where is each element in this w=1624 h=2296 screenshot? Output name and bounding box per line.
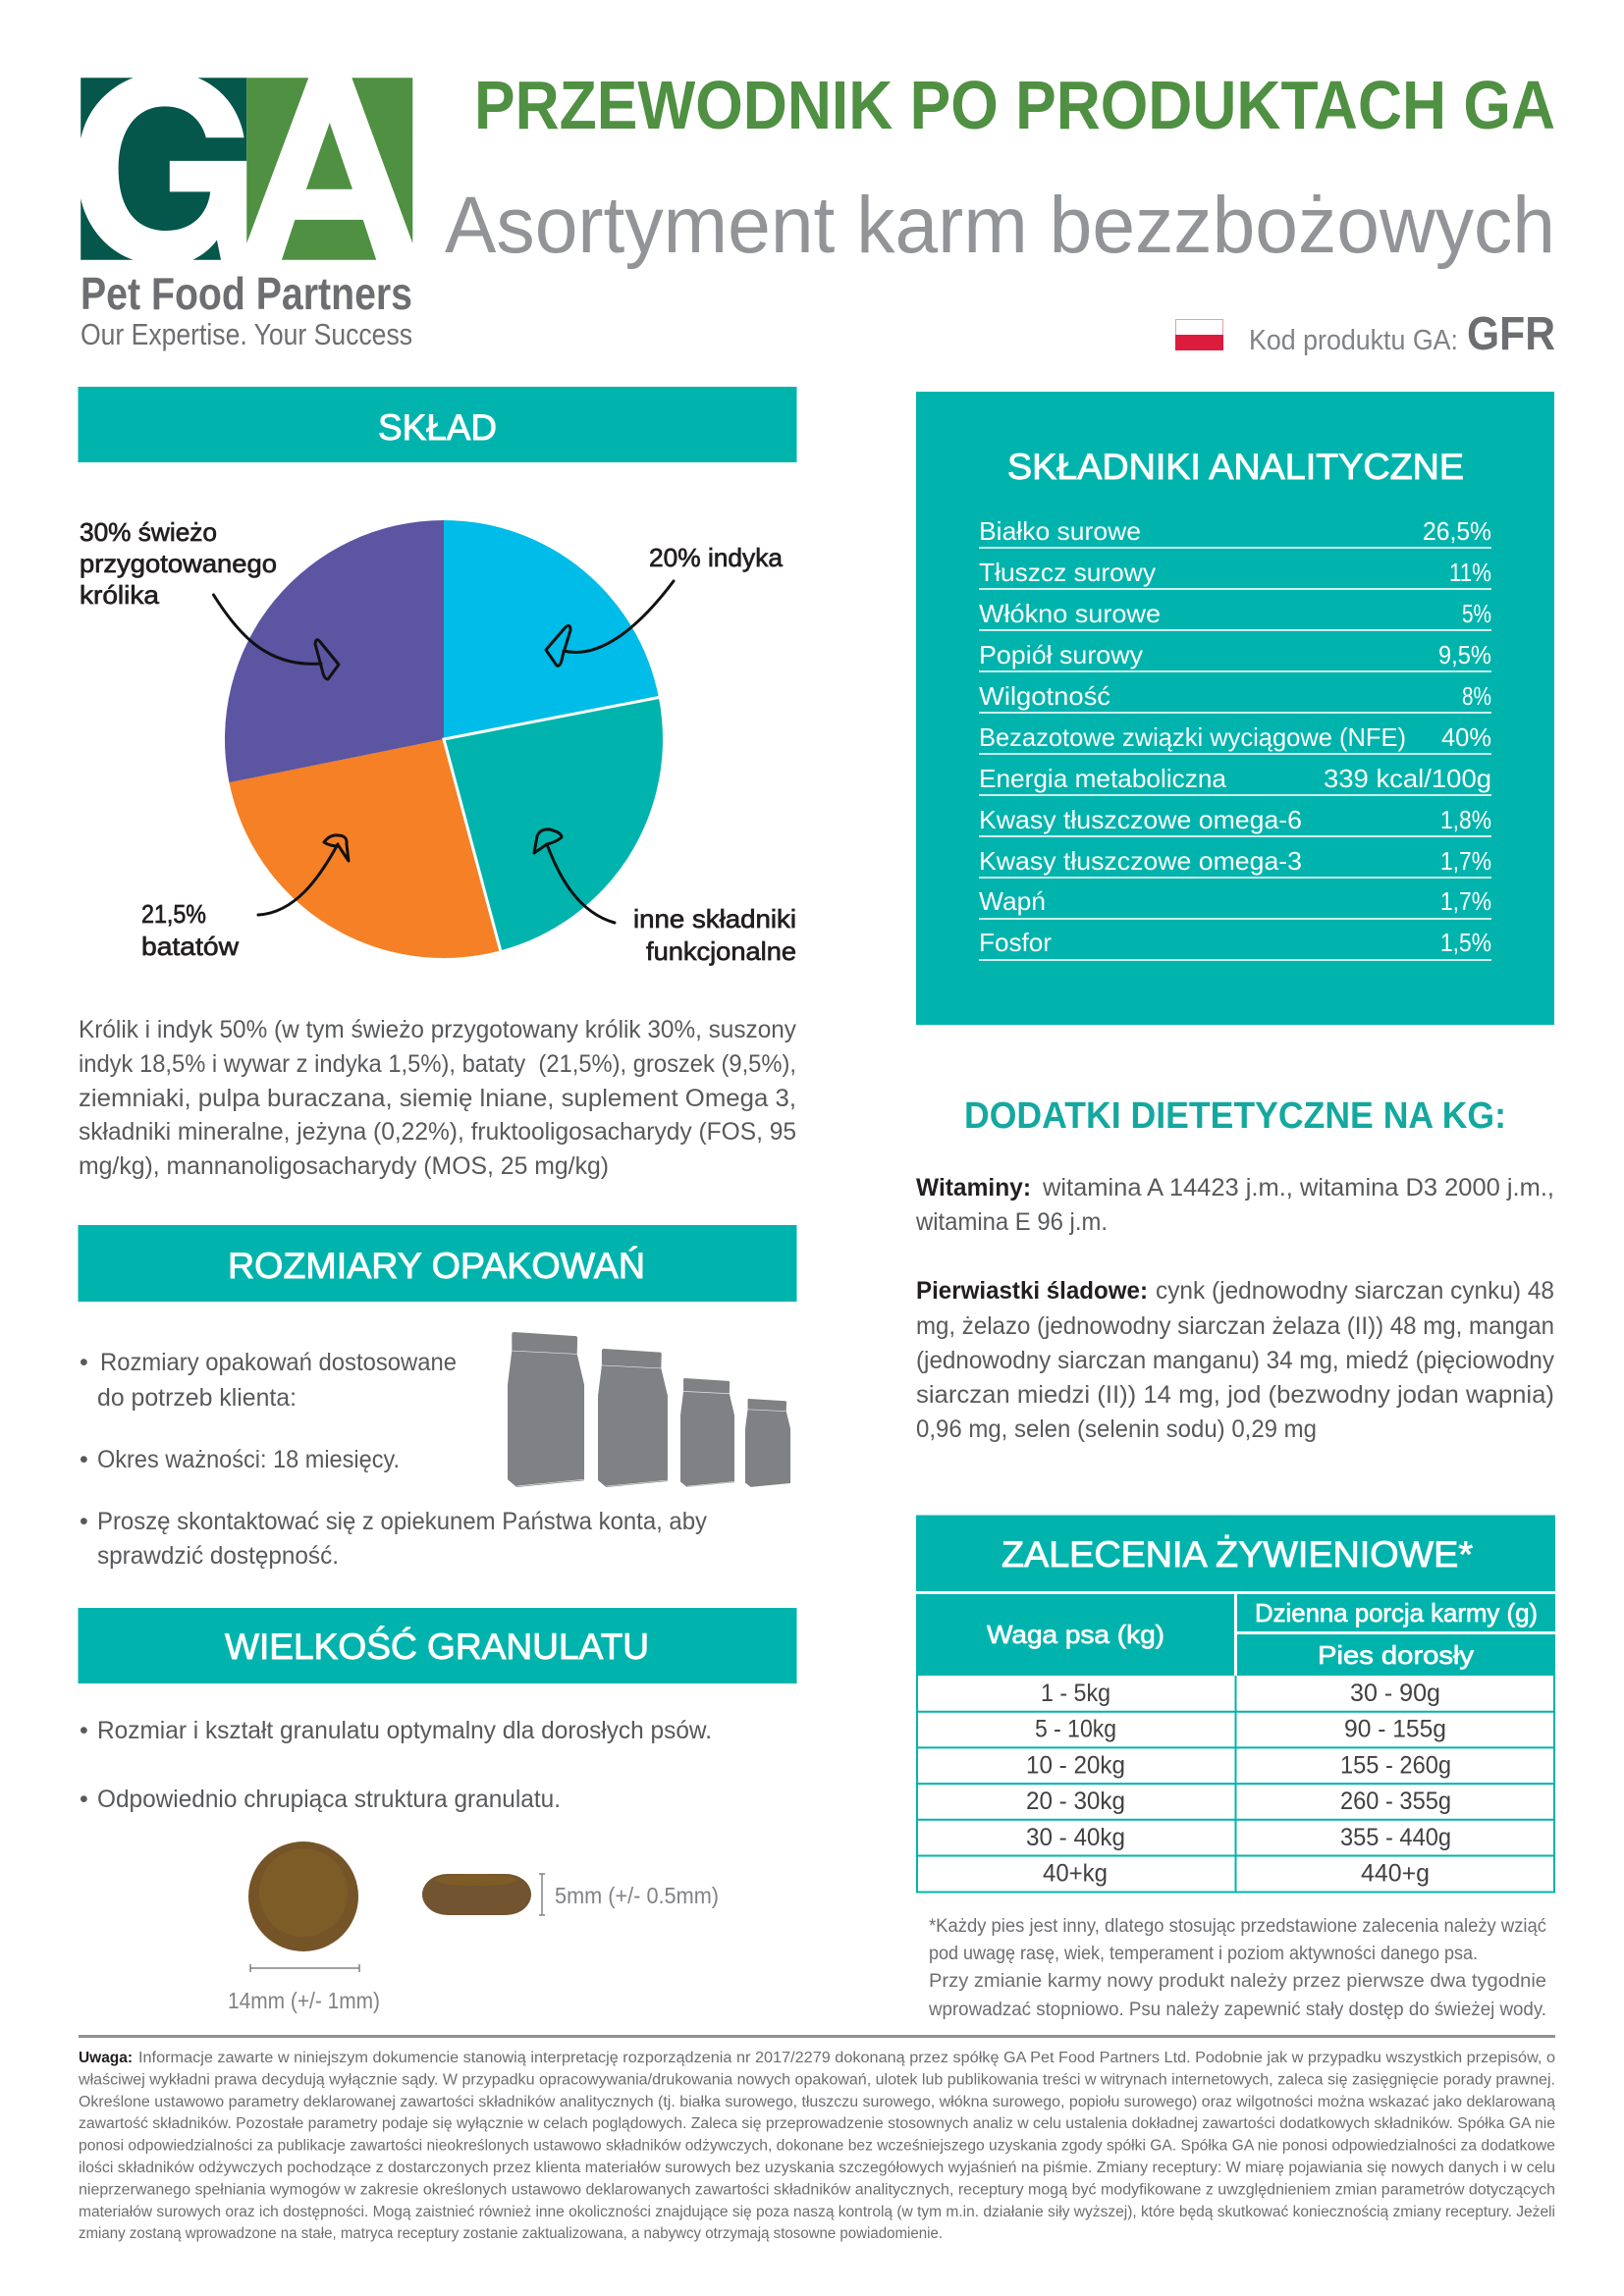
product code [1249, 308, 1555, 360]
row: fibre: 5% [1462, 599, 1491, 628]
pie label: rabbit: 30% świeżo [80, 517, 217, 547]
text block: ingredients [79, 1016, 796, 1180]
disclaimer [78, 2050, 1555, 2242]
dimension: kibble thickness: 5mm (+/- 0.5mm) [555, 1883, 719, 1908]
panel: pack sizes heading [79, 1225, 797, 1302]
dimension: kibble diameter [228, 1964, 380, 2013]
row: omega-3: Kwasy tłuszczowe omega-3 [979, 846, 1302, 876]
logo mark: G and A letters [81, 78, 412, 260]
pie label: other ingredients [633, 904, 796, 966]
row: omega-3 [979, 846, 1491, 879]
row: ash: Popiół surowy [979, 640, 1143, 669]
row: fat: Tłuszcz surowy [979, 558, 1156, 587]
text block: trace elements: cynk (jednowodny siarczan cynku) 48 [1156, 1277, 1554, 1305]
row: moisture: Wilgotność [979, 681, 1110, 711]
text block: trace elements: (jednowodny siarczan manganu) 34 mg, miedź (pięciowodny [916, 1347, 1554, 1374]
row: fibre [979, 599, 1491, 631]
row: omega-6: 1,8% [1440, 805, 1491, 834]
row: protein: Białko surowe [979, 516, 1141, 546]
text block: pack sizes bullets: Okres ważności: 18 miesięcy. [97, 1446, 400, 1473]
row: moisture [979, 681, 1491, 714]
row: fat [979, 558, 1491, 590]
table row: 5-10 kg: 5 - 10kg [1035, 1716, 1116, 1743]
panel: analytical constituents [916, 392, 1554, 1025]
text block: trace elements: mg, żelazo (jednowodny siarczan żelaza (II)) 48 mg, mangan [916, 1312, 1554, 1340]
pie label: sweet potato: 21,5% [141, 899, 206, 929]
text block: kibble bullets: Odpowiednio chrupiąca struktura granulatu. [97, 1786, 561, 1813]
pie chart: composition [225, 520, 663, 958]
table row: 30-40 kg: 355 - 440g [1340, 1824, 1451, 1851]
row: phosphorus: Fosfor [979, 928, 1052, 957]
logo wordmark: Pet Food Partners [81, 268, 412, 319]
row: phosphorus: 1,5% [1440, 928, 1491, 957]
row: NFE: 40% [1441, 722, 1491, 752]
dimension: kibble thickness [539, 1874, 719, 1915]
table row: 40+ kg: 40+kg [1043, 1859, 1108, 1887]
panel: skład heading: SKŁAD [378, 407, 497, 448]
icon: kibble top view [248, 1842, 358, 1951]
table row: 30-40 kg [1026, 1824, 1451, 1851]
row: fibre: Włókno surowe [979, 599, 1161, 628]
text block: kibble bullets: Rozmiar i kształt granulatu optymalny dla dorosłych psów. [97, 1717, 712, 1744]
table row: 20-30 kg: 260 - 355g [1340, 1788, 1451, 1815]
table row: 20-30 kg: 20 - 30kg [1026, 1788, 1125, 1815]
row: omega-6: Kwasy tłuszczowe omega-6 [979, 805, 1302, 834]
text block: trace elements: siarczan miedzi (II)) 14 mg, jod (bezwodny jodan wapnia) [916, 1381, 1554, 1409]
pie slice: turkey 20% [444, 520, 659, 739]
table header: adult dog: Pies dorosły [1318, 1640, 1474, 1670]
table header: dog weight: Waga psa (kg) [987, 1620, 1164, 1649]
bag: small [680, 1378, 734, 1487]
row: protein: 26,5% [1423, 516, 1491, 546]
table row: 10-20 kg: 10 - 20kg [1026, 1751, 1125, 1779]
table row: 5-10 kg: 90 - 155g [1344, 1716, 1446, 1743]
product code: Kod produktu GA: [1249, 325, 1458, 356]
icon: Polish flag [1175, 320, 1223, 350]
bag: medium [598, 1349, 668, 1487]
text block: kibble bullets: • [80, 1786, 88, 1813]
row: calcium: 1,7% [1440, 886, 1491, 916]
bag: smallest [745, 1399, 790, 1487]
logo: GA Pet Food Partners [81, 78, 412, 351]
row: energy [979, 764, 1491, 796]
heading: dietary additives: DODATKI DIETETYCZNE NA KG: [964, 1095, 1506, 1137]
arrow: rabbit [214, 595, 339, 679]
table row: 1-5 kg [1041, 1680, 1440, 1707]
disclaimer: zawartość składników. Pozostałe parametry podaje się wyłącznie w celach poglądowych. Zaleca się przeprowadzenie stosownych analiz w celu ustalenia dokładnej zawartości dodatkowych składników. Spółka GA nie [79, 2115, 1555, 2132]
pie slice: fresh rabbit 30% [225, 520, 444, 782]
table row: 1-5 kg: 30 - 90g [1350, 1680, 1440, 1707]
text block: pack sizes bullets: • [80, 1446, 88, 1473]
icon: pack size bags [508, 1332, 790, 1487]
panel: kibble size heading [79, 1608, 797, 1683]
row: protein [979, 516, 1491, 549]
text block: vitamins: witamina E 96 j.m. [915, 1208, 1108, 1236]
arrow: other ingredients [534, 829, 615, 923]
disclaimer: materiałów surowych oraz ich dostępności. Mogą zaistnieć również inne okoliczności znajdujące się poza naszą kontrolą (w tym m.in. działanie siły wyższej), które będą skutkować koniecznością zmiany receptury. Jeżeli [79, 2204, 1555, 2220]
footnote: pod uwagę rasę, wiek, temperament i poziom aktywności danego psa. [929, 1944, 1478, 1964]
text block: pack sizes bullets: sprawdzić dostępność. [97, 1542, 339, 1570]
panel heading: SKŁADNIKI ANALITYCZNE [1007, 447, 1464, 487]
bag: large [508, 1332, 584, 1487]
pie label: rabbit: królika [80, 580, 160, 610]
text block: ingredients: ziemniaki, pulpa buraczana, siemię lniane, suplement Omega 3, [79, 1085, 796, 1112]
text block: pack sizes bullets: • [80, 1508, 88, 1535]
row: energy: Energia metaboliczna [979, 764, 1227, 793]
pie label: sweet potato [141, 899, 239, 961]
dimension: kibble diameter: 14mm (+/- 1mm) [228, 1988, 380, 2013]
icon: kibble side view [422, 1874, 531, 1915]
table row: 40+ kg: 440+g [1361, 1859, 1430, 1887]
text block: pack sizes bullets: • [80, 1349, 88, 1376]
disclaimer: Określone ustawowo parametry deklarowanej zawartości składników analitycznych (tj. białka surowego, tłuszczu surowego, włókna surowego, popiołu surowego) oraz wilgotności można wskazać jako deklarowaną [79, 2094, 1555, 2110]
logo tagline: Our Expertise. Your Success [81, 317, 412, 351]
pie label: rabbit: przygotowanego [80, 549, 277, 578]
row: energy: 339 kcal/100g [1324, 764, 1491, 793]
panel: kibble size heading: WIELKOŚĆ GRANULATU [225, 1626, 649, 1667]
table row: 10-20 kg [1026, 1751, 1451, 1779]
pie label: turkey: 20% indyka [649, 543, 784, 572]
table header: adult dog [1237, 1634, 1555, 1676]
text block: pack sizes bullets: Rozmiary opakowań dostosowane [100, 1349, 457, 1376]
row: ash [979, 640, 1491, 672]
table header: daily portion: Dzienna porcja karmy (g) [1255, 1598, 1538, 1628]
text block: pack sizes bullets: do potrzeb klienta: [97, 1384, 297, 1412]
panel: pack sizes heading: ROZMIARY OPAKOWAŃ [228, 1246, 645, 1286]
disclaimer: ilości składników odżywczych pochodzące z dostarczonych przez klienta materiałów surowych bez uzyskania szczegółowych wyjaśnień na piśmie. Zmiany receptury: W miarę pojawiania się nowych danych i w celu [79, 2160, 1555, 2176]
pie label: other ingredients: inne składniki [633, 904, 796, 934]
text block: pack sizes bullets: Proszę skontaktować się z opiekunem Państwa konta, aby [97, 1508, 707, 1535]
row: omega-3: 1,7% [1440, 846, 1491, 876]
table row: 20-30 kg [1026, 1788, 1451, 1815]
panel: skład heading [79, 387, 797, 462]
disclaimer: ponosi odpowiedzialności za publikacje zawartości nieokreślonych ustawowo składników odżywczych, dokonane bez wcześniejszego uzyskania zgody spółki GA. Spółka GA nie ponosi odpowiedzialności za dodatkowe [79, 2138, 1555, 2155]
text block: ingredients: Królik i indyk 50% (w tym świeżo przygotowany królik 30%, suszony [79, 1016, 796, 1043]
subtitle: Asortyment karm bezzbożowych [445, 181, 1555, 270]
text block: pack sizes bullets [80, 1349, 707, 1570]
disclaimer: nieprzerwanego spełniania wymogów w zakresie określonych ustawowo deklarowanych zawartości składników analitycznych, receptury mogą być modyfikowane z uwzględnieniem zmian parametrów dotyczących [79, 2181, 1555, 2198]
disclaimer: zmiany zostaną wprowadzone na stałe, matryca receptury zostanie zaktualizowana, a nabywcy otrzymają stosowne powiadomienie. [79, 2225, 943, 2242]
row: phosphorus [979, 928, 1491, 961]
text block: trace elements: Pierwiastki śladowe: [916, 1277, 1148, 1305]
pie label: other ingredients: funkcjonalne [646, 936, 796, 966]
text block: trace elements: 0,96 mg, selen (selenin sodu) 0,29 mg [916, 1415, 1317, 1443]
text block: kibble bullets: • [80, 1717, 88, 1744]
row: calcium [979, 886, 1491, 920]
row: NFE: Bezazotowe związki wyciągowe (NFE) [979, 722, 1406, 752]
table row: 30-40 kg: 30 - 40kg [1026, 1824, 1125, 1851]
text block: vitamins: Witaminy: [916, 1174, 1031, 1201]
text block: ingredients: składniki mineralne, jeżyna (0,22%), fruktooligosacharydy (FOS, 95 [79, 1118, 796, 1146]
table row: 10-20 kg: 155 - 260g [1340, 1751, 1451, 1779]
pie slice: sweet potato 21.5% [229, 739, 501, 958]
table row: 5-10 kg [1035, 1716, 1446, 1743]
footnote: *Każdy pies jest inny, dlatego stosując przedstawione zalecenia należy wziąć [929, 1916, 1546, 1937]
table header: dog weight [916, 1594, 1234, 1676]
row: calcium: Wapń [979, 886, 1046, 916]
pie label: rabbit [80, 517, 277, 610]
arrow: sweet potato [258, 835, 349, 915]
row: fat: 11% [1449, 558, 1491, 587]
text block: trace elements [916, 1277, 1554, 1443]
disclaimer: Uwaga: [79, 2050, 133, 2066]
footnote: Przy zmianie karmy nowy produkt należy przez pierwsze dwa tygodnie [929, 1971, 1546, 1992]
row: omega-6 [979, 805, 1491, 837]
text block: vitamins [915, 1174, 1554, 1236]
arrow: turkey [546, 581, 674, 666]
pie label: sweet potato: batatów [141, 932, 239, 961]
text block: ingredients: mg/kg), mannanoligosacharydy (MOS, 25 mg/kg) [79, 1152, 609, 1180]
table grid [917, 1676, 1554, 1893]
table title [916, 1516, 1555, 1591]
disclaimer: właściwej wykładni prawa decydują wyłącznie sądy. W przypadku opracowywania/drukowania nowych opakowań, ulotek lub publikowania treści w witrynach internetowych, zaleca się zasięgnięcie porady prawnej. [78, 2071, 1555, 2088]
text block: vitamins: witamina A 14423 j.m., witamina D3 2000 j.m., [1042, 1174, 1554, 1201]
table row: 40+ kg [1043, 1859, 1430, 1887]
table row: 1-5 kg: 1 - 5kg [1041, 1680, 1110, 1707]
text block: kibble bullets [80, 1717, 712, 1813]
pie slice: other functional ingredients [444, 697, 663, 950]
disclaimer: Informacje zawarte w niniejszym dokumencie stanowią interpretację rozporządzenia nr 2017/2279 dokonaną przez spółkę GA Pet Food Partners Ltd. Podobnie jak w przypadku wszystkich przepisów, o [138, 2050, 1555, 2066]
row: moisture: 8% [1462, 681, 1491, 711]
footnote [928, 1916, 1546, 2020]
table title: ZALECENIA ŻYWIENIOWE* [1001, 1534, 1473, 1575]
table: feeding guide [916, 1516, 1555, 1893]
product code: GFR [1467, 308, 1555, 360]
row: ash: 9,5% [1438, 640, 1491, 669]
footnote: wprowadzać stopniowo. Psu należy zapewnić stały dostęp do świeżej wody. [928, 2000, 1546, 2020]
text block: ingredients: indyk 18,5% i wywar z indyka 1,5%), bataty (21,5%), groszek (9,5%), [79, 1050, 796, 1078]
